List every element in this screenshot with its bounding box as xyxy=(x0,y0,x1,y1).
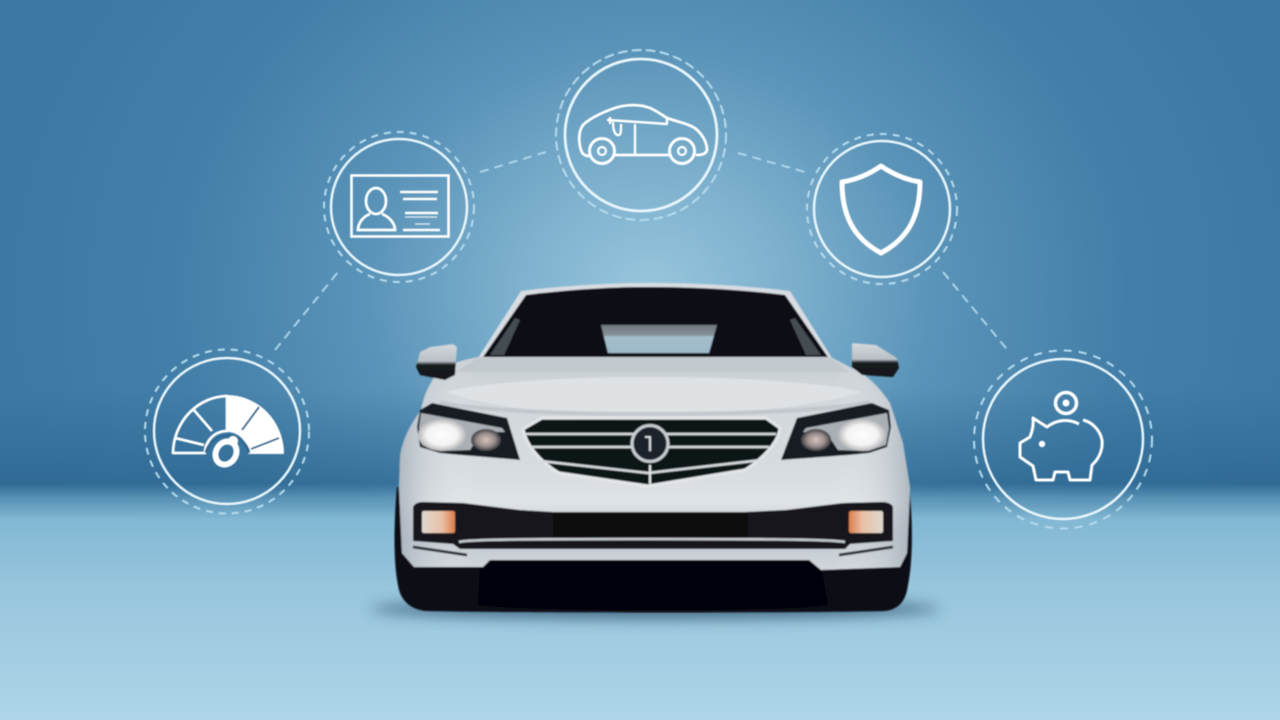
dashed connector lines xyxy=(275,152,1010,353)
car: windscreen side reflections xyxy=(490,318,821,355)
silver car front view xyxy=(394,283,912,612)
icon: car side view in circle xyxy=(556,50,726,220)
car shadow on floor xyxy=(370,599,940,619)
icon: speedometer gauge in circle xyxy=(145,350,309,514)
car: windscreen reflection xyxy=(601,325,717,353)
icon: driver licence ID card in circle xyxy=(324,132,474,282)
car: left mirror xyxy=(416,344,457,380)
car: windscreen xyxy=(483,287,828,357)
car: tyres and underbody xyxy=(394,487,912,612)
icon: shield in circle xyxy=(807,134,957,284)
icon: piggy bank with coin in circle xyxy=(974,350,1152,528)
car: left headlight xyxy=(417,403,520,460)
car: right headlight xyxy=(781,403,891,460)
car: roof frame xyxy=(478,283,832,358)
car: lower air intake xyxy=(413,502,893,555)
car: silver body xyxy=(399,357,910,570)
car: right mirror xyxy=(852,343,899,377)
car: hood shading xyxy=(455,358,850,372)
car: front grille xyxy=(523,418,780,486)
